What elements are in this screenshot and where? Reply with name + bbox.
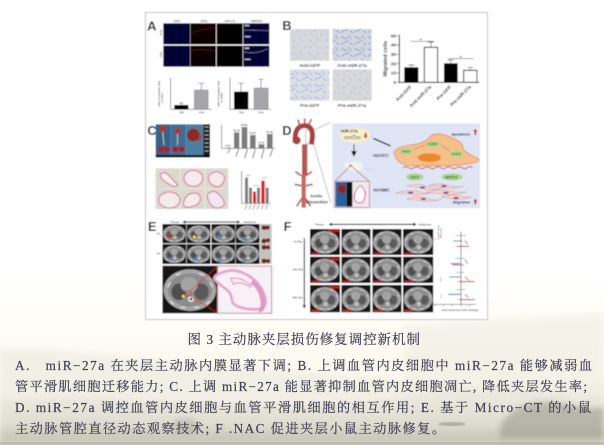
bar chart: intima: NTA (199, 110, 204, 114)
thorax to abdomen arrow: Abdomen (243, 220, 256, 224)
forest plot: NAC group (440, 227, 443, 238)
bar chart: media: in media (219, 92, 223, 103)
transwell micrographs: Anti-miR-27a (337, 63, 367, 69)
caption line 1: A. miR−27a 在夹层主动脉内膜显著下调; B. 上调血管内皮细胞中 miR−27a 能够减弱血 (15, 357, 592, 373)
label: migration (453, 199, 477, 204)
bar chart: migrated cells: Anti-GFP (395, 84, 413, 102)
transwell micrographs: Anti-GFP (299, 63, 321, 69)
thorax to abdomen arrow: Abdomen (419, 222, 432, 226)
enlarged CT slice (162, 266, 217, 313)
panel letter B: B (282, 19, 291, 33)
forest plot (434, 224, 479, 312)
bar chart: migrated cells: * (460, 55, 462, 60)
thorax to abdomen arrow: Thorax (170, 220, 180, 224)
time arrow: 1st Day (293, 239, 303, 243)
pill: MMP2/9: MMP2/9 (445, 175, 458, 179)
CT slice rows: 7th (156, 251, 161, 255)
panel A: immunofluorescence and bar charts (147, 19, 271, 114)
time arrow: 14th Day (292, 268, 304, 272)
panel letter A: A (147, 19, 157, 34)
bar chart: migrated cells: 50 (391, 33, 397, 39)
bar chart: migrated cells: 40 (391, 43, 397, 49)
arrow: to HUVEC (373, 138, 391, 146)
endothelial cell: FADD (402, 149, 410, 153)
bar chart: apoptosis (242, 171, 271, 209)
bar chart: media: miR-27a positive cells (216, 80, 220, 107)
bar chart: migrated cells: * (420, 38, 422, 43)
inset: aorta photo and section (335, 166, 369, 207)
bar chart: incidence: 11.1% (258, 142, 265, 144)
fluorescence micrograph grid: TAD (159, 51, 163, 57)
bar chart: migrated cells (383, 33, 479, 108)
thorax to abdomen arrow (170, 220, 256, 224)
label: HUVEC: HUVEC (373, 153, 390, 158)
zoom lines and box (306, 122, 331, 202)
panel letter E: E (148, 220, 156, 234)
icon: aorta (293, 118, 313, 208)
transwell micrographs: Pre-GFP (300, 103, 320, 109)
label: aortic dissection: Aortic (310, 193, 323, 198)
transwell micrographs (290, 29, 372, 109)
bar chart: media: TAD (239, 110, 244, 114)
smooth muscle cells (395, 184, 471, 201)
pill: MMP2/9 (441, 173, 463, 181)
fluorescence micrograph grid: MERGE (251, 19, 262, 23)
histology enlargement (190, 266, 272, 313)
gross aorta photos (260, 224, 272, 264)
caption body text (15, 357, 592, 436)
icon: mouse (344, 162, 375, 171)
CT slice rows (156, 224, 260, 264)
fluorescence micrograph grid: miR-27a (224, 19, 236, 23)
label: HASMC: HASMC (373, 187, 391, 192)
forest plot: Aortic intimal tear at NAC discharge (442, 309, 479, 312)
caption line 4: 主动脉管腔直径动态观察技术; F .NAC 促进夹层小鼠主动脉修复。 (15, 420, 445, 436)
panel E: micro-CT observation (148, 220, 272, 313)
caption line 3: D. miR−27a 调控血管内皮细胞与血管平滑肌细胞的相互作用; E. 基于 Micro−CT 的小鼠 (15, 399, 591, 415)
forest plot: Control group (437, 224, 440, 238)
bar chart: media: NTA (259, 110, 264, 114)
bar chart: intima: TAD (179, 110, 184, 114)
endothelial cell (394, 134, 479, 169)
panel F: NAC repair CT series and forest plot (284, 220, 479, 312)
CT slice grid (310, 229, 433, 312)
fluorescence micrograph grid: NTA (159, 30, 163, 35)
thorax to abdomen arrow (315, 222, 432, 226)
bar chart: migrated cells: Pre-miR-27a (449, 84, 472, 107)
CT slice rows: 1st (156, 232, 160, 236)
bar chart: migrated cells: Anti-miR-27a (409, 84, 433, 108)
miR-27a ellipse (340, 128, 370, 143)
figure caption title: 图 3 主动脉夹层损伤修复调控新机制 (188, 331, 420, 347)
bar chart: media (216, 78, 271, 114)
bar chart: intima (157, 78, 212, 114)
bar chart: migrated cells: 20 (391, 61, 397, 67)
panel letter C: C (147, 124, 156, 138)
bar chart: migrated cells: 0 (394, 80, 397, 86)
mouse aorta photos (156, 124, 210, 157)
label: apoptosis: Apoptosis (451, 132, 470, 136)
caption line 2: 管平滑肌细胞迁移能力; C. 上调 miR−27a 能显著抑制血管内皮细胞凋亡, 降低夹层发生率; (15, 378, 587, 394)
fluorescence micrograph grid (159, 19, 269, 67)
bar chart: intima: miR-27a positive cells (157, 80, 161, 107)
bar chart: incidence: 66.7% (233, 130, 240, 132)
bar chart: migrated cells: 10 (391, 71, 397, 77)
panel D: schematic of miR-27a mechanism (282, 118, 480, 208)
pill: GDF8 (406, 173, 424, 181)
time arrow: 28th Day (292, 295, 304, 299)
histology sections (156, 168, 228, 209)
bar chart: incidence: 88.9% (241, 125, 248, 127)
bar chart: incidence: 60.0% (266, 132, 273, 134)
fluorescence micrograph grid: CD31 (200, 19, 208, 23)
panel B: migration assay (282, 19, 479, 109)
fluorescence micrograph grid: DAPI (173, 19, 180, 23)
panel C: aneurysm photos, bars and histology (147, 124, 275, 209)
bar chart: migrated cells: Migrated cells (383, 41, 389, 76)
thorax to abdomen arrow: Thorax (315, 222, 324, 226)
label: apoptosis (451, 129, 477, 136)
bar chart: incidence (222, 125, 275, 158)
panel letter D: D (282, 124, 291, 138)
label: aortic dissection: Dissection (306, 199, 328, 204)
panel letter F: F (284, 220, 292, 234)
transwell micrographs: Pre-miR-27a (338, 103, 366, 109)
endothelial cell: CASP3 (451, 152, 461, 156)
bar chart: incidence: 0.0% (225, 145, 230, 147)
endothelial cell: CASP8 (428, 142, 437, 146)
label: migration: Migration (453, 200, 471, 204)
figure panel (146, 12, 488, 320)
arrow: to mouse (352, 144, 356, 156)
bar chart: migrated cells: 30 (391, 52, 397, 58)
pill: GDF8: GDF8 (410, 175, 419, 179)
time arrow (292, 238, 306, 309)
blue schematic background (332, 123, 480, 208)
bar chart: intima: in intima (160, 92, 164, 103)
bar chart: migrated cells: Pre-GFP (436, 84, 452, 101)
bar chart: incidence: 55.6% (249, 133, 256, 135)
miR-27a ellipse: miR-27a (341, 128, 358, 133)
